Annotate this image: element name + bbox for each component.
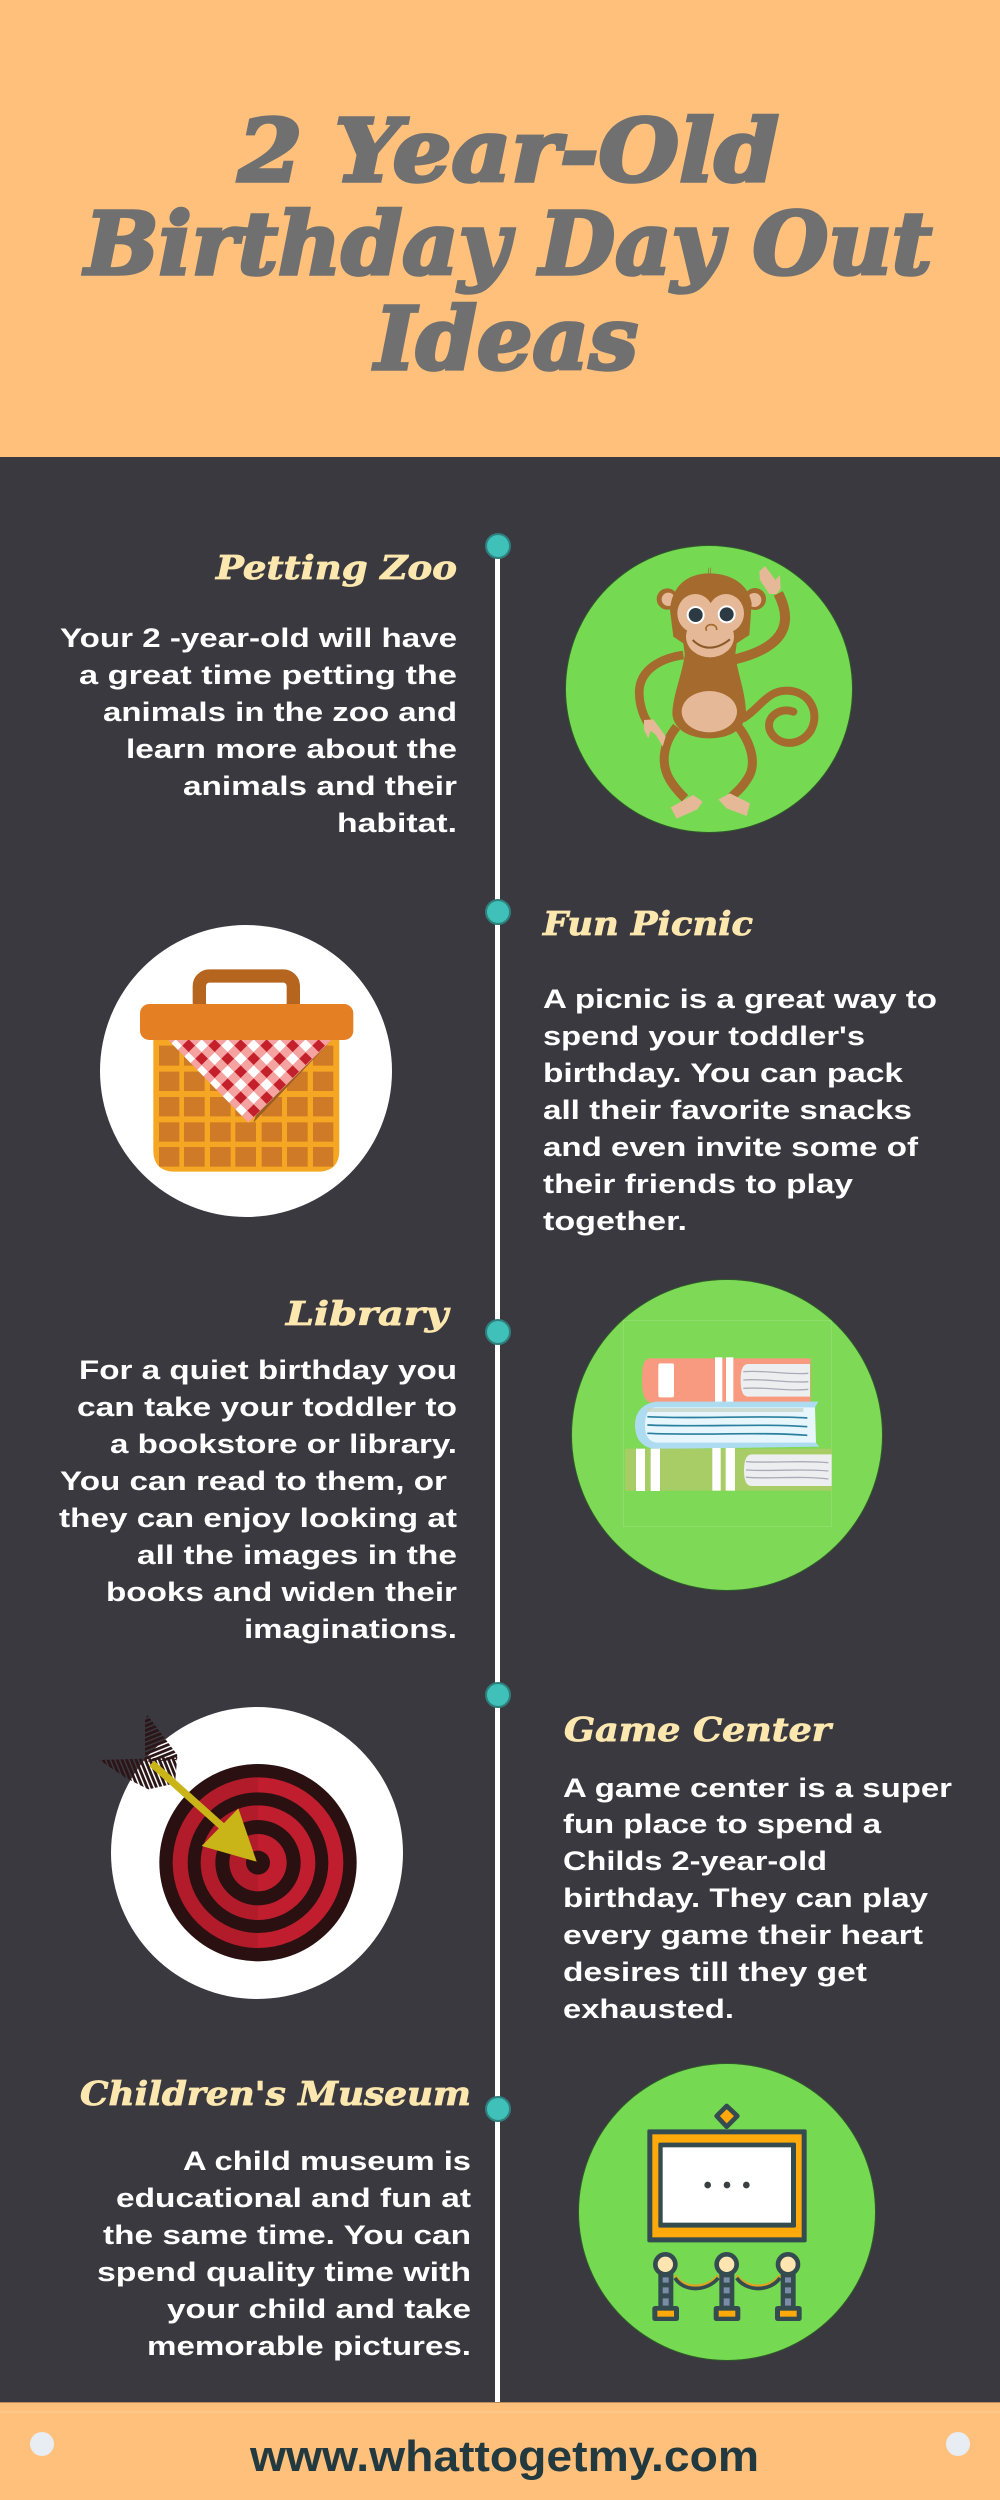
title: Ideas [372, 289, 638, 390]
text: library: You can read to them, or [60, 1466, 448, 1496]
icon: picnic basket in white circle [100, 925, 392, 1217]
timeline [486, 534, 510, 2404]
text: library: they can enjoy looking at [59, 1503, 457, 1533]
text: library: all the images in the [137, 1540, 457, 1570]
text: children's museum [97, 2146, 471, 2361]
heading: fun picnic: Fun Picnic [542, 904, 753, 943]
heading: library: Library [285, 1294, 451, 1333]
text: petting zoo: Your 2 -year-old will have [60, 623, 457, 653]
text: children's museum: A child museum is [183, 2146, 471, 2176]
panel: library [59, 1279, 883, 1644]
panel: fun picnic [100, 904, 937, 1236]
text: game center: A game center is a super [563, 1773, 953, 1803]
text: library: books and widen their [106, 1577, 458, 1607]
text: library: For a quiet birthday you [79, 1355, 457, 1385]
text: fun picnic [543, 984, 937, 1236]
heading: game center: Game Center [564, 1710, 834, 1749]
panel: children's museum [80, 2063, 876, 2361]
text: petting zoo: habitat. [337, 808, 457, 838]
text: fun picnic: spend your toddler's [543, 1021, 865, 1051]
text: library [59, 1355, 458, 1644]
text: children's museum: the same time. You can [103, 2220, 471, 2250]
title: Birthday Day Out [82, 194, 932, 295]
icon: framed exhibit with rope barriers in green circle [578, 2063, 876, 2361]
text: fun picnic: all their favorite snacks [543, 1095, 912, 1125]
timeline dot 3 [486, 1320, 510, 1344]
text: fun picnic: their friends to play [543, 1169, 853, 1199]
text: petting zoo [60, 623, 458, 838]
website url: www.whattogetmy.com [249, 2432, 759, 2481]
text: petting zoo: a great time petting the [79, 660, 457, 690]
text: fun picnic: together. [543, 1206, 687, 1236]
text: library: can take your toddler to [77, 1392, 457, 1422]
text: fun picnic: A picnic is a great way to [543, 984, 937, 1014]
text: fun picnic: birthday. You can pack [543, 1058, 904, 1088]
text: game center: birthday. They can play [563, 1883, 928, 1913]
text: library: imaginations. [244, 1614, 457, 1644]
panel: petting zoo [60, 545, 853, 838]
timeline dot 2 [486, 900, 510, 924]
panel: game center [99, 1707, 953, 2024]
footer band [0, 2402, 1000, 2500]
text: library: a bookstore or library. [110, 1429, 457, 1459]
text: children's museum: educational and fun at [116, 2183, 471, 2213]
text: children's museum: your child and take [167, 2294, 471, 2324]
heading: petting zoo: Petting Zoo [215, 548, 457, 587]
timeline dot 4 [486, 1683, 510, 1707]
header band [0, 0, 1000, 457]
text: game center: every game their heart [563, 1920, 923, 1950]
heading: children's museum: Children's Museum [80, 2074, 471, 2113]
timeline dot 1 [486, 534, 510, 558]
text: game center: fun place to spend a [563, 1809, 882, 1839]
footer hole right [946, 2432, 970, 2456]
text: fun picnic: and even invite some of [543, 1132, 919, 1162]
icon: stack of books in green circle [571, 1279, 883, 1591]
title: 2 Year-Old [237, 101, 779, 202]
footer hole left [30, 2432, 54, 2456]
text: game center [563, 1773, 953, 2024]
text: petting zoo: learn more about the [126, 734, 457, 764]
text: petting zoo: animals and their [183, 771, 458, 801]
icon: monkey in green circle [565, 545, 853, 833]
text: children's museum: memorable pictures. [147, 2331, 471, 2361]
text: petting zoo: animals in the zoo and [103, 697, 457, 727]
timeline dot 5 [486, 2097, 510, 2121]
icon: dart and target in white circle [99, 1707, 403, 1999]
dark background panel [0, 457, 1000, 2402]
text: game center: Childs 2-year-old [563, 1846, 827, 1876]
title [82, 101, 932, 390]
text: children's museum: spend quality time with [97, 2257, 471, 2287]
text: game center: exhausted. [563, 1994, 734, 2024]
text: game center: desires till they get [563, 1957, 867, 1987]
